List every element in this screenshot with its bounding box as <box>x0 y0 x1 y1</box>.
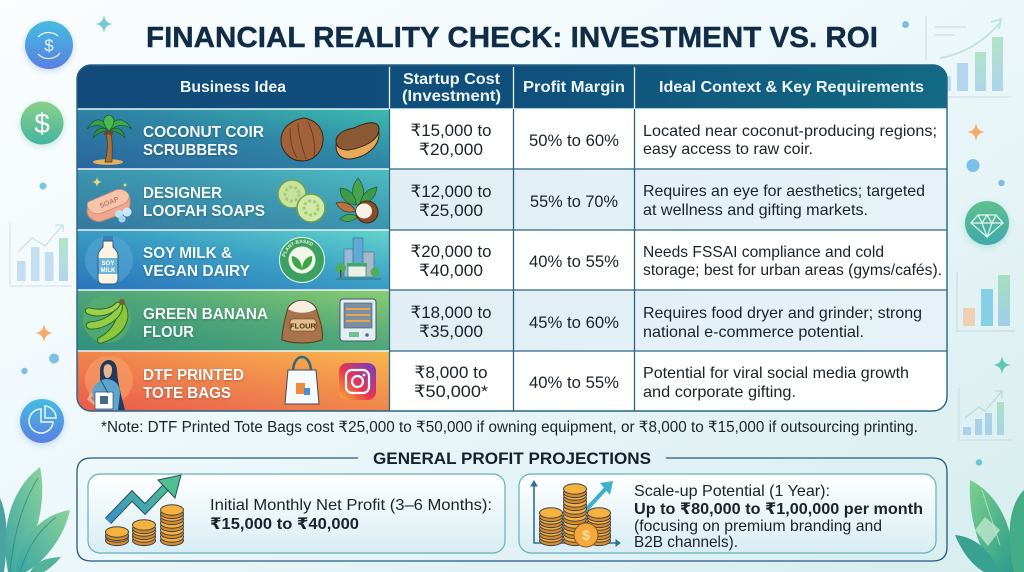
context column: at wellness and gifting markets. <box>643 202 868 219</box>
chart: top right decorative <box>926 16 1010 97</box>
label <box>142 369 244 400</box>
icon: soy milk bottle: MILK <box>101 268 116 274</box>
label: COCONUT COIR <box>143 124 264 141</box>
icon: dollar badge <box>20 102 64 146</box>
icon: coconut <box>281 118 323 161</box>
context column: and corporate gifting. <box>643 384 796 401</box>
context column: Requires food dryer and grinder; strong <box>643 305 922 322</box>
startup cost column: ₹25,000 <box>419 201 483 220</box>
label: VEGAN DAIRY <box>143 263 251 280</box>
profit margin column: 45% to 60% <box>529 313 619 332</box>
table header: (Investment) <box>402 88 501 105</box>
icon: soap bar <box>87 177 132 222</box>
icon: coins with axes and arrow <box>531 481 620 547</box>
row tints <box>389 169 947 351</box>
icon: food dryer <box>340 299 376 341</box>
label <box>142 126 264 157</box>
label: DTF PRINTED <box>143 367 244 384</box>
startup cost column <box>410 121 492 401</box>
decorative sparkles and dots <box>21 15 1011 466</box>
startup cost column: ₹40,000 <box>419 261 483 280</box>
startup cost column: ₹35,000 <box>419 322 483 341</box>
icon: leaves and coconut <box>336 178 378 223</box>
context column: Requires an eye for aesthetics; targeted <box>643 183 925 200</box>
profit text: Initial Monthly Net Profit (3–6 Months): <box>210 497 492 514</box>
label: FLOUR <box>143 324 194 341</box>
leaves: bottom left <box>0 467 70 572</box>
label: DESIGNER <box>143 185 222 202</box>
startup cost column: ₹8,000 to <box>414 363 488 382</box>
row: coconut coir scrubbers <box>77 109 389 169</box>
leaves: bottom right <box>955 480 1024 572</box>
panel: general profit projections <box>77 449 947 561</box>
title: FINANCIAL REALITY CHECK: INVESTMENT VS. ROI <box>146 22 878 54</box>
table header <box>77 65 947 109</box>
scale-up text: Up to ₹80,000 to ₹1,00,000 per month <box>634 501 923 518</box>
row: designer loofah soaps <box>77 169 389 230</box>
label <box>142 247 250 278</box>
profit margin column <box>529 131 619 392</box>
scale-up text: Scale-up Potential (1 Year): <box>634 483 830 500</box>
context column: Needs FSSAI compliance and cold <box>643 244 884 261</box>
icon: soap bar: SOAP <box>99 196 120 210</box>
profit text <box>210 497 492 533</box>
chart: left decorative <box>10 223 72 286</box>
startup cost column: ₹20,000 to <box>410 242 492 261</box>
icon: dollar badge: $ <box>34 108 50 139</box>
label: TOTE BAGS <box>143 385 231 402</box>
label <box>143 187 265 218</box>
table header: Startup Cost <box>403 71 501 88</box>
context column: storage; best for urban areas (gyms/cafés). <box>643 262 942 279</box>
icon: palm tree <box>87 115 132 165</box>
startup cost column: ₹50,000* <box>414 382 488 401</box>
icon: printed tote bag <box>285 357 319 404</box>
row: dtf printed tote bags <box>77 351 389 411</box>
scale-up text: B2B channels). <box>634 534 738 551</box>
icon: gem badge <box>965 201 1009 247</box>
icon: plant-based badge: PLANT-BASED <box>282 240 313 257</box>
card: scale-up potential <box>519 474 936 553</box>
icon: dollar cycle badge: $ <box>44 36 54 55</box>
context column: Potential for viral social media growth <box>643 365 909 382</box>
context column <box>643 123 942 401</box>
startup cost column: ₹20,000 <box>419 140 483 159</box>
label: GREEN BANANA <box>143 306 268 323</box>
row: soy milk and vegan dairy <box>78 230 389 290</box>
icon: woman with tote bag <box>85 356 133 410</box>
icon: flour sack <box>282 300 323 343</box>
scale-up text: (focusing on premium branding and <box>634 518 882 535</box>
startup cost column: ₹15,000 to <box>410 121 492 140</box>
icon: soy milk bottle: SOY <box>102 261 114 267</box>
context column: national e-commerce potential. <box>643 324 864 341</box>
table <box>76 64 948 412</box>
label: SOY MILK & <box>143 245 232 262</box>
icon: flour sack: FLOUR <box>290 322 316 330</box>
icon: pie chart badge <box>20 399 64 445</box>
table header: Ideal Context & Key Requirements <box>659 79 924 96</box>
startup cost column: ₹12,000 to <box>410 182 492 201</box>
icon: coins with axes and arrow: $ <box>582 527 590 543</box>
icon: rising coins <box>106 475 184 546</box>
table header: Business Idea <box>180 79 286 96</box>
icon: instagram logo <box>339 363 376 400</box>
icon: plant-based badge <box>279 237 325 283</box>
profit margin column: 50% to 60% <box>529 131 619 150</box>
context column: easy access to raw coir. <box>643 141 813 158</box>
label: LOOFAH SOAPS <box>143 203 265 220</box>
table header: Profit Margin <box>523 79 625 96</box>
profit margin column: 40% to 55% <box>529 252 619 271</box>
profit margin column: 40% to 55% <box>529 373 619 392</box>
icon: loofah slices <box>278 180 325 222</box>
icon: city skyline <box>336 238 381 279</box>
label: SCRUBBERS <box>143 142 238 159</box>
chart: right middle decorative <box>957 272 1015 331</box>
row: green banana flour <box>77 290 389 351</box>
icon: coir sponge <box>336 123 379 159</box>
startup cost column: ₹18,000 to <box>410 303 492 322</box>
footnote: *Note: DTF Printed Tote Bags cost ₹25,000 to ₹50,000 if owning equipment, or ₹8,000 to ₹15,000 if outsourcing printing. <box>101 419 918 436</box>
profit text: ₹15,000 to ₹40,000 <box>210 516 359 533</box>
profit margin column: 55% to 70% <box>530 192 618 211</box>
label <box>142 308 268 339</box>
icon: dollar cycle badge <box>25 21 73 71</box>
card: initial monthly net profit <box>88 474 505 553</box>
scale-up text <box>634 483 923 551</box>
heading: GENERAL PROFIT PROJECTIONS <box>373 449 651 468</box>
icon: soy milk bottle <box>85 236 133 284</box>
chart: right lower decorative <box>959 388 1012 440</box>
context column: Located near coconut-producing regions; <box>643 123 937 140</box>
icon: green bananas <box>83 295 131 343</box>
